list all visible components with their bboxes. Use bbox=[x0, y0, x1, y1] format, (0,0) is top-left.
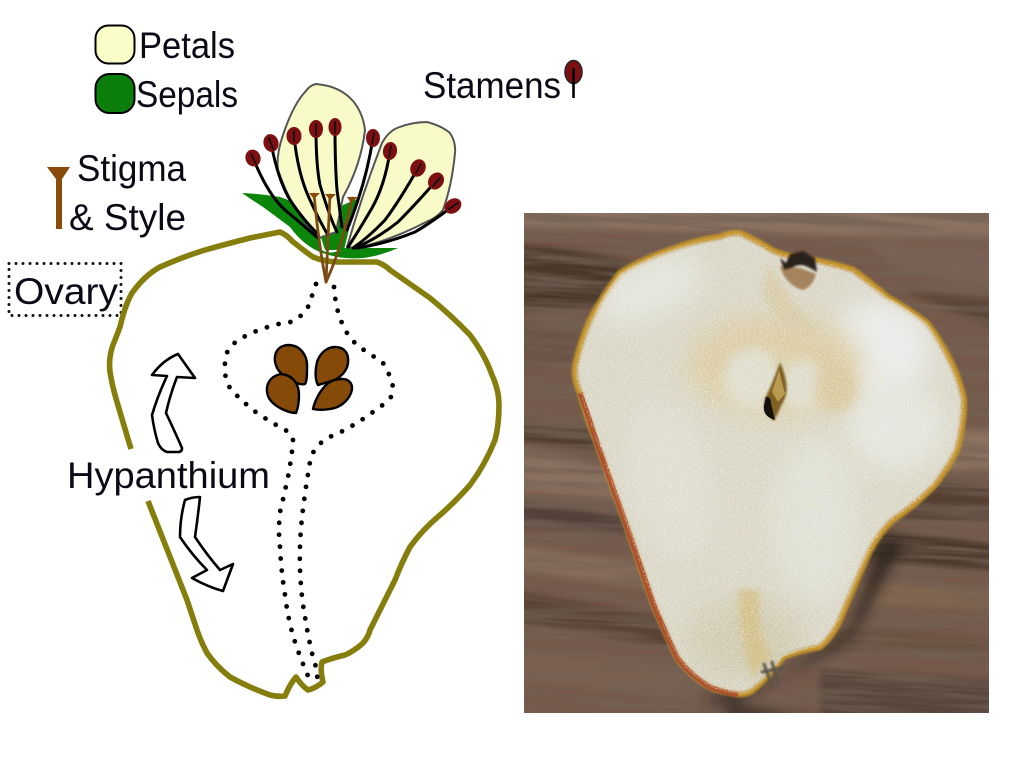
legend: petals bbox=[96, 25, 235, 66]
sepals bbox=[242, 193, 398, 258]
legend: petals: Petals bbox=[139, 25, 235, 66]
legend: stigma and style bbox=[47, 148, 186, 238]
styles and stigmas bbox=[309, 193, 358, 282]
legend: stigma and style: & Style bbox=[69, 197, 186, 238]
pear stem end bbox=[780, 251, 817, 290]
petals bbox=[278, 84, 455, 248]
legend: ovary: Ovary bbox=[14, 271, 119, 312]
legend: stamens: Stamens bbox=[423, 65, 561, 106]
pear shadow bbox=[700, 540, 905, 720]
stamens bbox=[243, 118, 464, 248]
arrow: upward growth bbox=[152, 354, 195, 452]
pear outline bbox=[110, 232, 499, 696]
pear blossom end bbox=[762, 662, 782, 686]
wood background bbox=[524, 213, 989, 713]
legend: sepals: Sepals bbox=[136, 74, 238, 115]
legend: sepals bbox=[96, 74, 238, 115]
seeds bbox=[267, 345, 352, 413]
arrow: downward growth bbox=[180, 497, 233, 591]
legend: stigma and style: Stigma bbox=[77, 148, 186, 189]
label: hypanthium: Hypanthium bbox=[67, 455, 270, 496]
ovary dotted outline bbox=[225, 284, 393, 683]
legend: ovary bbox=[9, 264, 121, 316]
pear core slit and seed bbox=[764, 362, 787, 421]
pear flesh shading bbox=[570, 230, 970, 700]
pear skin and flesh base bbox=[575, 233, 964, 695]
photo: halved pear on a wooden table bbox=[524, 213, 989, 713]
